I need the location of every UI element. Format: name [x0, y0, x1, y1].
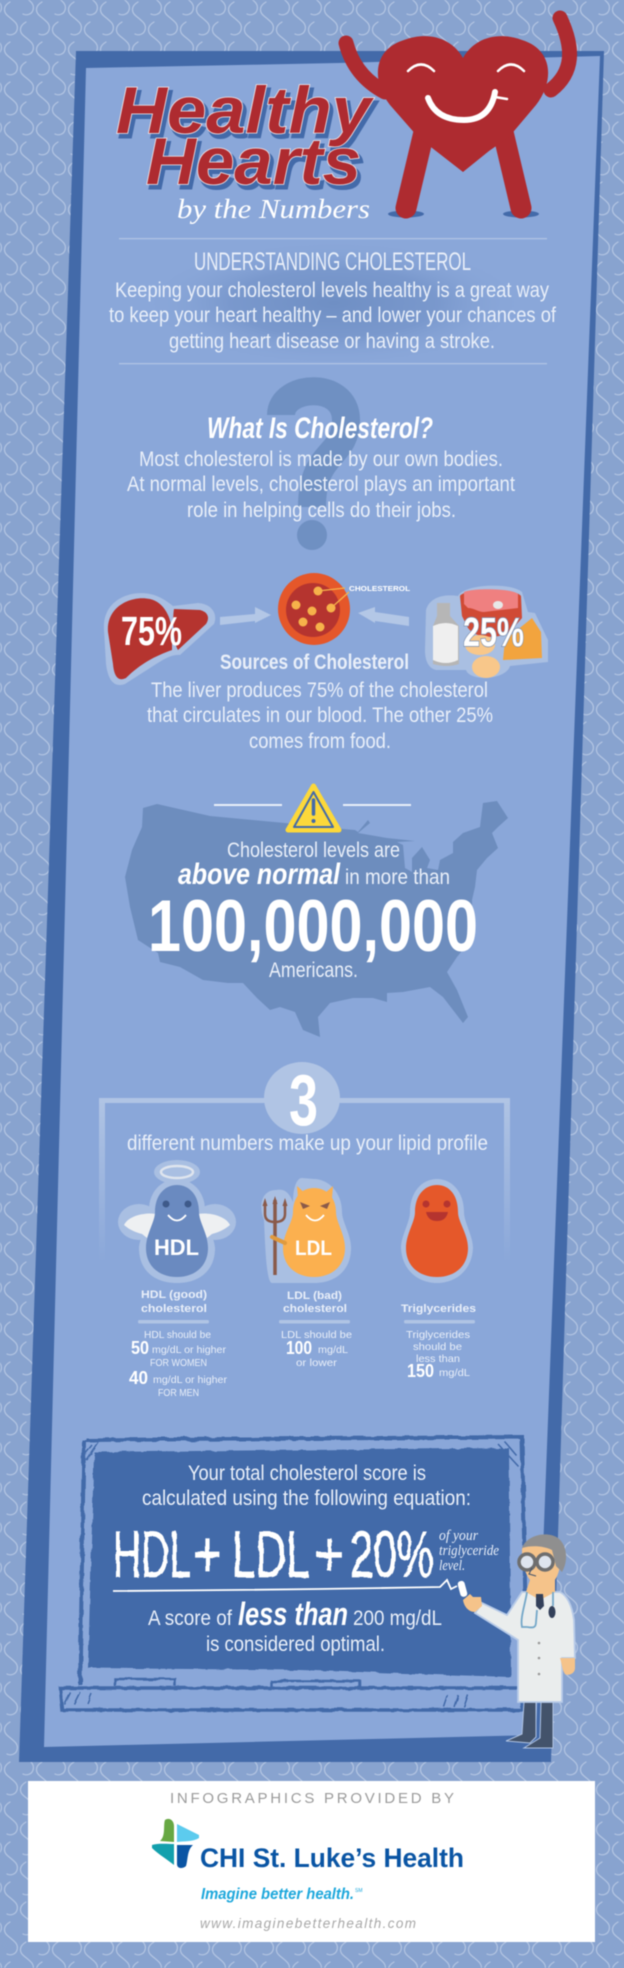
- column: triglyceride values: [401, 1303, 476, 1381]
- logo mark: [152, 1819, 199, 1868]
- intro paragraph: [109, 279, 556, 353]
- chalkboard text: less than: [238, 1596, 348, 1632]
- what is cholesterol text: Most cholesterol is made by our own bodies.: [139, 448, 503, 471]
- heading: understanding cholesterol: UNDERSTANDING CHOLESTEROL: [194, 248, 471, 276]
- title: Hearts: [146, 124, 361, 198]
- column: triglyceride values: mg/dL: [439, 1367, 470, 1379]
- icon: food 25%: 25%: [463, 609, 524, 655]
- warning divider: [214, 786, 411, 830]
- column: HDL values: 50: [131, 1338, 149, 1358]
- sources of cholesterol text: The liver produces 75% of the cholesterol: [151, 679, 488, 702]
- mascot: smiling heart: [346, 18, 570, 218]
- chalkboard: [60, 1437, 527, 1710]
- icon: warning triangle: [288, 786, 339, 830]
- equation note: level.: [439, 1558, 465, 1574]
- column: LDL values: mg/dL: [318, 1344, 348, 1356]
- sources of cholesterol text: Sources of Cholesterol: [220, 651, 409, 674]
- title: by the Numbers: [177, 194, 370, 224]
- column: triglyceride values: Triglycerides: [401, 1303, 476, 1315]
- badge: number 3: 3: [289, 1061, 318, 1141]
- arrow: food to cell: [358, 607, 409, 626]
- LDL character: LDL: [295, 1237, 332, 1260]
- intro section: [109, 238, 556, 365]
- column: LDL values: [279, 1290, 352, 1369]
- statistic: 100,000,000 Americans: Cholesterol levels are: [227, 839, 400, 862]
- column: triglyceride values: less than: [416, 1353, 460, 1365]
- what is cholesterol text: role in helping cells do their jobs.: [187, 499, 456, 522]
- statistic: 100,000,000 Americans: [148, 839, 478, 982]
- equation note: triglyceride: [439, 1543, 499, 1559]
- what is cholesterol text: What Is Cholesterol?: [207, 412, 433, 445]
- column: HDL values: 40: [129, 1368, 148, 1388]
- icon: blood cell with cholesterol: [278, 573, 410, 645]
- column: HDL values: FOR WOMEN: [150, 1357, 207, 1369]
- equation: HDL: [113, 1517, 191, 1591]
- column: LDL values: LDL (bad): [287, 1290, 342, 1302]
- column: HDL values: HDL should be: [144, 1329, 211, 1341]
- column: HDL values: cholesterol: [141, 1303, 207, 1315]
- equation: [113, 1517, 434, 1591]
- title: [116, 73, 378, 224]
- sources of cholesterol text: that circulates in our blood. The other 25%: [147, 704, 493, 727]
- chalkboard text: is considered optimal.: [206, 1633, 385, 1656]
- what is cholesterol text: At normal levels, cholesterol plays an important: [127, 473, 515, 496]
- chalkboard text: A score of: [148, 1607, 232, 1630]
- tagline: Imagine better health.: [201, 1886, 354, 1903]
- statistic: 100,000,000 Americans: 100,000,000: [148, 886, 478, 967]
- question mark watermark: [281, 391, 346, 550]
- intro paragraph: getting heart disease or having a stroke.: [169, 330, 495, 353]
- icon: liver 75%: [104, 593, 215, 685]
- chalkboard text: [113, 1462, 499, 1656]
- lipid profile box: [99, 1061, 510, 1263]
- sources of cholesterol text: [147, 651, 493, 753]
- sponsor heading: INFOGRAPHICS PROVIDED BY: [170, 1790, 454, 1807]
- badge: number 3: [264, 1061, 340, 1141]
- triglycerides character: [401, 1179, 473, 1283]
- icon: liver 75%: 75%: [121, 608, 182, 654]
- column: triglyceride values: Triglycerides: [406, 1329, 470, 1341]
- column: HDL values: HDL (good): [141, 1289, 207, 1301]
- statistic: 100,000,000 Americans: Americans.: [269, 959, 358, 982]
- what is cholesterol text: [127, 412, 515, 522]
- website: www.imaginebetterhealth.com: [200, 1916, 416, 1931]
- doctor illustration: [457, 1534, 575, 1748]
- column: HDL values: mg/dL or higher: [153, 1374, 228, 1386]
- chalkboard text: 200 mg/dL: [353, 1607, 442, 1630]
- chalkboard text: Your total cholesterol score is: [188, 1462, 426, 1485]
- statistic: 100,000,000 Americans: in more than: [345, 866, 450, 889]
- map of the United States: [125, 801, 508, 1037]
- column: triglyceride values: 150: [407, 1361, 434, 1381]
- sources of cholesterol text: comes from food.: [249, 730, 391, 753]
- column: LDL values: or lower: [296, 1357, 338, 1369]
- chalkboard text: calculated using the following equation:: [142, 1487, 471, 1510]
- column: LDL values: LDL should be: [281, 1329, 352, 1341]
- sponsor panel: [28, 1781, 595, 1942]
- equation note: [439, 1528, 499, 1574]
- equation note: of your: [439, 1528, 478, 1544]
- column: triglyceride values: should be: [413, 1341, 462, 1353]
- HDL character: [118, 1160, 236, 1283]
- logo wordmark: CHI St. Luke’s Health: [200, 1843, 464, 1873]
- column: HDL values: mg/dL or higher: [152, 1344, 227, 1356]
- LDL character: [261, 1178, 351, 1283]
- intro paragraph: to keep your heart healthy – and lower your chances of: [109, 304, 556, 327]
- statistic: 100,000,000 Americans: above normal: [178, 858, 341, 891]
- title: Healthy: [119, 77, 378, 151]
- equation: LDL: [232, 1517, 310, 1591]
- equation: +: [193, 1517, 222, 1591]
- title: Hearts: [149, 128, 364, 202]
- column: HDL values: [129, 1289, 228, 1399]
- HDL character: HDL: [154, 1235, 199, 1260]
- column: LDL values: cholesterol: [283, 1303, 347, 1315]
- column: HDL values: FOR MEN: [158, 1387, 199, 1399]
- lipid profile caption: different numbers make up your lipid profile: [127, 1132, 488, 1155]
- title: Healthy: [116, 73, 375, 147]
- arrow: liver to cell: [220, 607, 271, 625]
- column: LDL values: 100: [286, 1338, 312, 1358]
- equation: 20%: [350, 1517, 434, 1591]
- icon: blood cell with cholesterol: CHOLESTEROL: [349, 584, 410, 593]
- tagline: SM: [355, 1888, 362, 1894]
- intro paragraph: Keeping your cholesterol levels healthy is a great way: [115, 279, 549, 302]
- icon: food 25%: [425, 586, 548, 678]
- equation: +: [315, 1517, 344, 1591]
